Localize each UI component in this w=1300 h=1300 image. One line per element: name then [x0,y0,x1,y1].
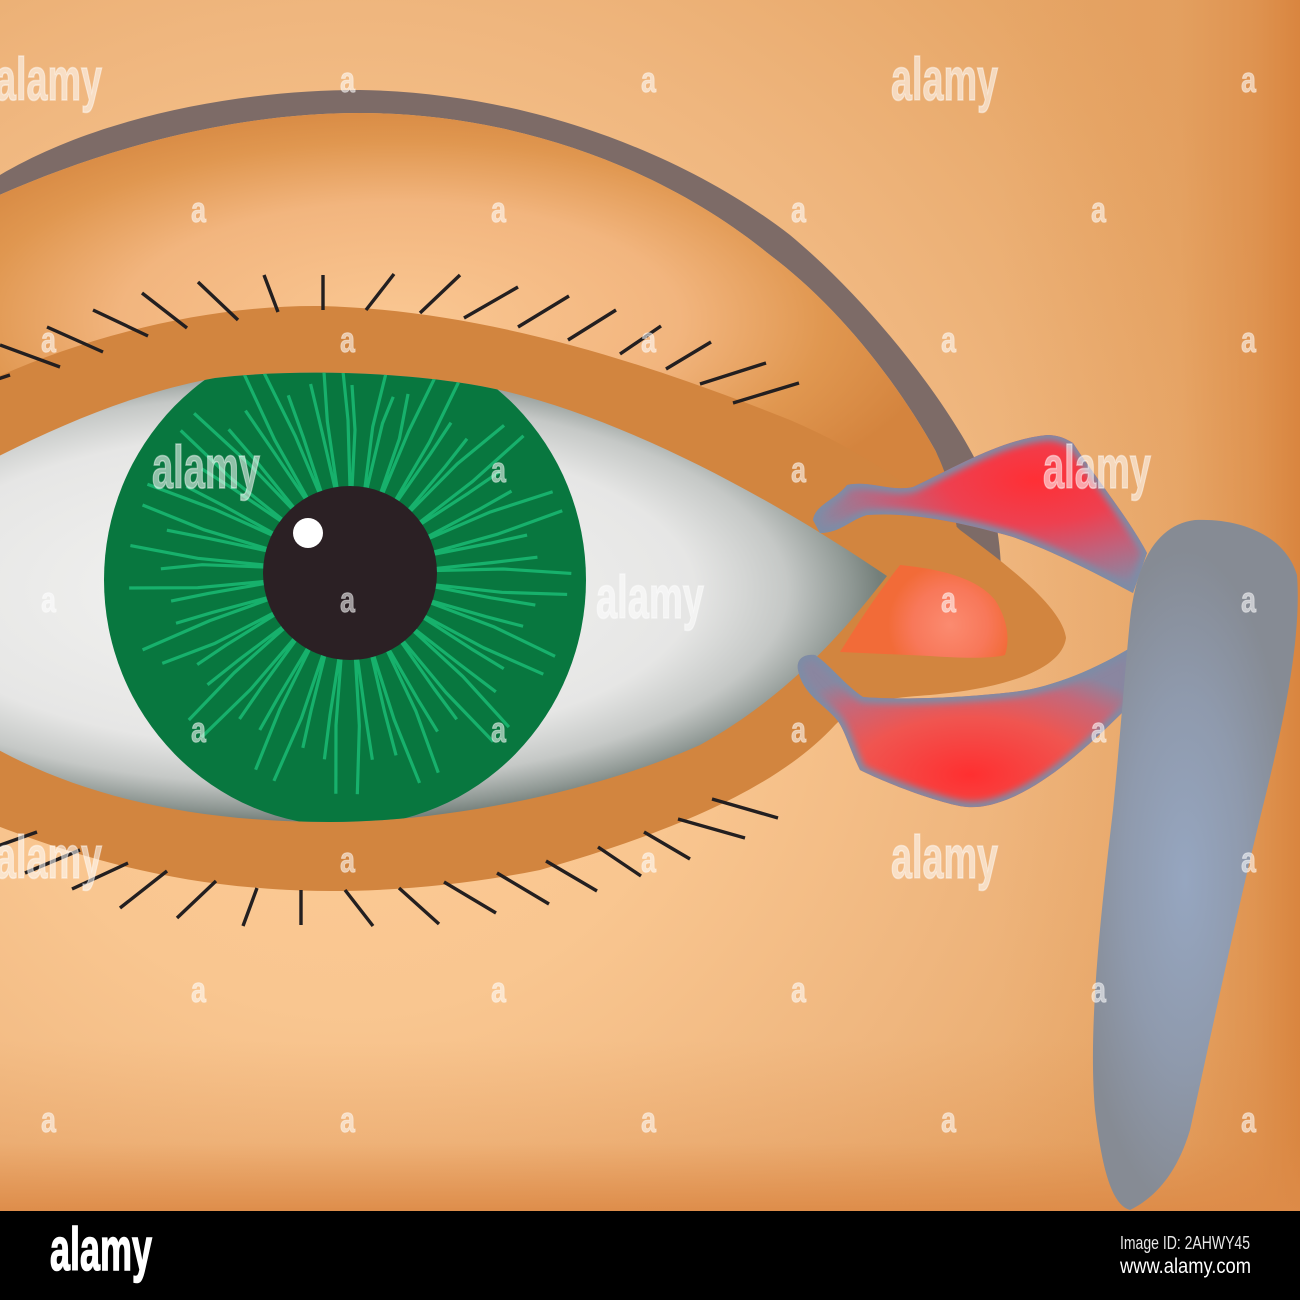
stock watermark: a [340,319,356,360]
upper lacrimal canaliculus [813,435,1147,593]
stock watermark: a [41,579,57,620]
stock watermark: a [1241,839,1257,880]
upper eyelid fold [0,90,1001,568]
stock watermark: a [941,579,957,620]
pupil highlight [293,518,323,548]
stock watermark: a [1091,709,1107,750]
sclera [0,373,887,822]
iris [104,334,586,826]
stock watermark: alamy [152,434,260,501]
stock watermark: a [791,449,807,490]
stock watermark: a [491,189,507,230]
stock watermark: a [41,1099,57,1140]
stock watermark: a [1241,319,1257,360]
stock watermark: a [641,839,657,880]
stock watermark: a [941,319,957,360]
lower eyelashes [0,799,778,926]
stock watermark: alamy [596,564,704,631]
stock watermark: a [41,319,57,360]
stock watermark: alamy [0,824,102,891]
iris fibres [129,346,571,794]
lacrimal caruncle [840,565,1008,658]
image id: Image ID: 2AHWY45 [1120,1233,1250,1253]
stock watermark: alamy [1043,434,1151,501]
stock watermark: a [340,59,356,100]
eyelid rim and inner corner [0,306,1066,891]
stock watermark: a [191,189,207,230]
stock watermark: a [191,969,207,1010]
stock watermark: a [491,969,507,1010]
eyelid skin [0,113,957,530]
footer bar [0,1211,1300,1300]
website: www.alamy.com [1119,1255,1251,1278]
stock watermark: a [1241,1099,1257,1140]
stock watermark: a [340,839,356,880]
stock watermark: a [1241,59,1257,100]
lower lacrimal canaliculus [798,645,1135,807]
brow crease outline [0,90,1001,568]
stock watermark: a [641,319,657,360]
stock watermark: a [641,59,657,100]
stock watermark: alamy [0,46,102,113]
stock watermark: a [191,709,207,750]
stock watermark: a [1091,189,1107,230]
stock watermark: alamy [891,46,998,113]
stock watermark: a [791,969,807,1010]
stock watermark: a [491,709,507,750]
stock watermark: a [791,189,807,230]
stock watermark: a [340,579,356,620]
stock watermark: a [641,1099,657,1140]
stock watermark: a [941,1099,957,1140]
footer logo: alamy [50,1216,152,1283]
stock watermark: a [491,449,507,490]
eyeball [0,334,887,826]
upper eyelashes [0,274,799,403]
lacrimal sac and duct [1093,520,1298,1210]
stock watermark: alamy [891,824,998,891]
stock watermark: a [340,1099,356,1140]
pupil [263,486,437,660]
stock watermark: a [1241,579,1257,620]
stock watermark: a [1091,969,1107,1010]
stock watermark: a [791,709,807,750]
